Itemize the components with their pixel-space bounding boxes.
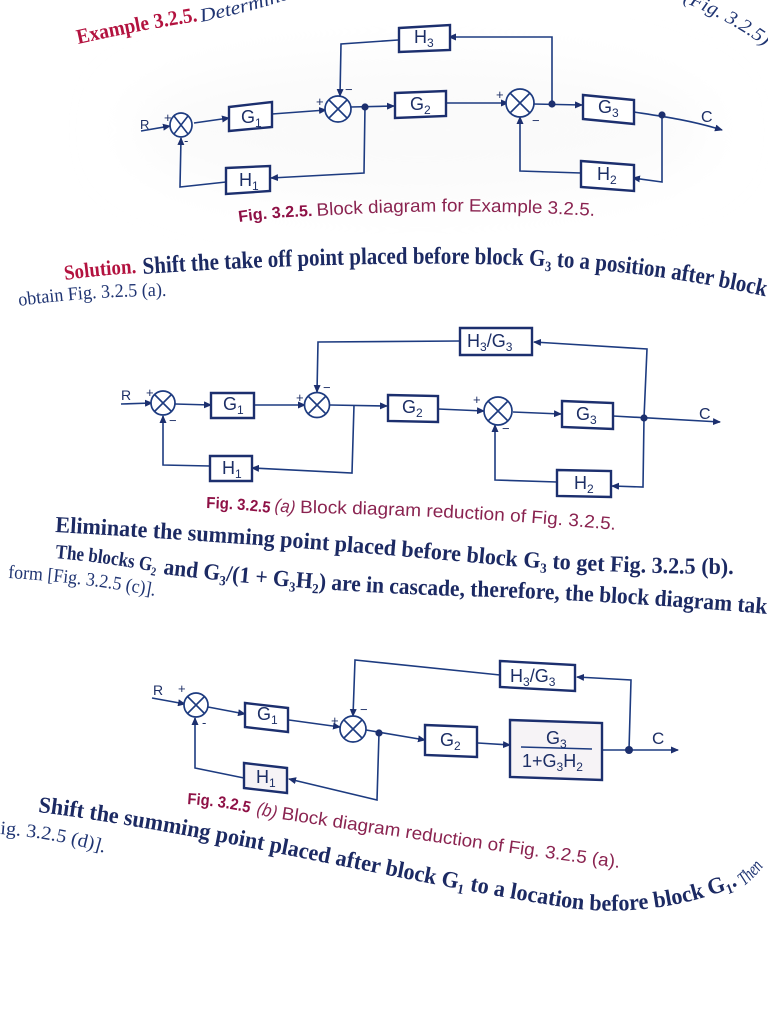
summing junction 1: [170, 113, 192, 137]
text block: eliminate the summing point: Eliminate the summing point placed before block G₃ to get Fig. 3.2.5 (b).: [55, 517, 733, 579]
block G3 over 1+G3H2: 3: [557, 760, 564, 774]
caption: Fig. 3.2.5: Fig. 3.2.5.: [238, 205, 312, 223]
signal labels: [140, 82, 713, 148]
block H3/G3: [500, 661, 575, 691]
summing junction 2: [304, 392, 330, 418]
text block: eliminate the summing point: [8, 517, 767, 614]
takeoff points: [375, 729, 633, 754]
block G3: 3: [612, 106, 619, 120]
block H3: H: [414, 27, 427, 47]
signal labels: [153, 681, 664, 748]
connecting lines and arrows: [152, 660, 678, 800]
block H1: H: [222, 458, 235, 478]
diagram: Fig. 3.2.5 (b): [152, 660, 678, 800]
block G2: [395, 91, 446, 118]
block H1: [244, 763, 287, 793]
block G1: 1: [271, 713, 278, 727]
signal labels: +: [473, 392, 481, 407]
block H3/G3: 3: [480, 340, 487, 354]
signal labels: −: [345, 82, 353, 97]
block H3/G3: H: [510, 666, 523, 686]
caption: Fig. 3.2.5 (b): Block diagram reduction of Fig. 3.2.5 (a).: [282, 807, 618, 870]
connecting lines and arrows: [141, 37, 722, 187]
block H1: [226, 166, 270, 194]
text block: eliminate the summing point: The blocks G₂: [56, 545, 156, 576]
block H3/G3: 3: [549, 675, 556, 689]
block H2: [557, 470, 611, 497]
text block: eliminate the summing point: and G₃/(1 + G₃H₂) are in cascade, therefore, the block diagram tak: [164, 562, 767, 614]
connecting lines and arrows: [121, 341, 720, 487]
signal labels: -: [184, 133, 188, 148]
caption: Fig. 3.2.5 (a): Fig. 3.2.5: [207, 496, 270, 513]
takeoff points: [361, 100, 666, 119]
block H3: 3: [427, 36, 434, 50]
signal labels: −: [532, 113, 540, 128]
block H1: H: [256, 767, 269, 787]
block H3/G3: [460, 328, 532, 355]
block G2: 2: [454, 739, 461, 753]
block G2: 2: [424, 103, 431, 117]
summing junction 1: [184, 693, 208, 717]
signal labels: −: [502, 421, 510, 436]
summing junction 2: [325, 96, 351, 122]
block G3 over 1+G3H2: G: [546, 728, 560, 748]
signal labels: -: [202, 715, 206, 730]
block G3 over 1+G3H2: 1+G: [522, 751, 557, 771]
block H3/G3: 3: [506, 340, 513, 354]
block G2: G: [410, 94, 424, 114]
signal labels: [121, 380, 711, 436]
summing junction 2: [340, 716, 366, 742]
caption: Fig. 3.2.5 (b): (b): [257, 802, 277, 821]
block G3: 3: [590, 413, 597, 427]
summing junction 3: [506, 89, 534, 117]
block H2: H: [597, 164, 610, 184]
block H2: [581, 161, 634, 191]
block G3 over 1+G3H2: 2: [576, 760, 583, 774]
caption: Fig. 3.2.5 (a): [207, 496, 614, 530]
text block: shift the summing point: ig. 3.2.5 (d)].: [0, 822, 104, 854]
signal labels: −: [323, 380, 331, 395]
caption: Fig. 3.2.5 (b): [188, 793, 618, 870]
block H1: [210, 456, 252, 481]
summing junction 1: [151, 391, 175, 415]
block G1: 1: [237, 403, 244, 417]
signal labels: C: [699, 406, 711, 423]
caption: Fig. 3.2.5 (b): Fig. 3.2.5: [188, 793, 251, 812]
block G3 over 1+G3H2: 3: [560, 737, 567, 751]
heading: example title: [76, 0, 768, 46]
block H2: 2: [587, 482, 594, 496]
text block: shift the summing point: Shift the summing point placed after block G₁ to a location before block G₁.: [39, 798, 736, 911]
signal labels: C: [652, 729, 664, 748]
signal labels: +: [316, 94, 324, 109]
takeoff point: [640, 414, 648, 422]
block H3/G3: /G: [487, 331, 506, 351]
diagram: Fig. 3.2.5 block diagram: [140, 25, 722, 194]
signal labels: R: [140, 117, 149, 132]
block G2: G: [440, 730, 454, 750]
block H3/G3: 3: [523, 675, 530, 689]
caption: Fig. 3.2.5 (a): (a): [275, 498, 295, 516]
block G1: 1: [255, 116, 262, 130]
text block: eliminate the summing point: form [Fig. 3.2.5 (c)].: [8, 564, 154, 598]
block G3: [562, 401, 613, 429]
caption: Fig. 3.2.5: [238, 198, 594, 223]
signal labels: +: [178, 681, 186, 696]
block G1: [229, 102, 272, 131]
signal labels: +: [496, 87, 504, 102]
block G3: [583, 95, 634, 124]
signal labels: R: [121, 387, 131, 403]
block H1: 1: [235, 467, 242, 481]
block G1: [211, 393, 254, 418]
block H1: 1: [269, 776, 276, 790]
text block: solution: obtain Fig. 3.2.5 (a).: [19, 283, 166, 306]
signal labels: R: [153, 682, 163, 698]
heading: example title: Example 3.2.5.: [76, 8, 197, 44]
signal labels: −: [360, 702, 368, 717]
block H1: H: [239, 170, 252, 190]
signal labels: −: [169, 413, 177, 428]
signal labels: +: [146, 385, 154, 400]
block H1: 1: [252, 179, 259, 193]
block G1: G: [223, 394, 237, 414]
block H3: [399, 25, 450, 52]
block G1: G: [241, 107, 255, 127]
text block: solution: Shift the take off point placed before block G₃ to a position after block: [143, 246, 768, 296]
text block: solution: Solution.: [64, 260, 136, 280]
block H3/G3: H: [467, 331, 480, 351]
caption: Fig. 3.2.5 (a): Block diagram reduction of Fig. 3.2.5.: [302, 500, 614, 530]
block H2: 2: [610, 173, 617, 187]
block G3: G: [576, 404, 590, 424]
signal labels: +: [296, 390, 304, 405]
block G3 over 1+G3H2: H: [563, 751, 576, 771]
caption: Fig. 3.2.5: Block diagram for Example 3.2.5.: [318, 198, 594, 216]
block H2: H: [574, 473, 587, 493]
block G3: G: [598, 97, 612, 117]
block G1: G: [257, 704, 271, 724]
summing junction 3: [484, 397, 512, 425]
block G1: [245, 703, 288, 732]
block G2: [388, 395, 438, 422]
block G3 over 1+G3H2: [510, 720, 602, 780]
block G2: G: [402, 397, 416, 417]
block H3/G3: /G: [530, 666, 549, 686]
signal labels: +: [164, 110, 172, 125]
signal labels: +: [331, 713, 339, 728]
block G2: [425, 725, 477, 757]
text block: shift the summing point: Then: [737, 862, 764, 886]
block G2: 2: [416, 406, 423, 420]
diagram: Fig. 3.2.5 (a): [121, 328, 720, 497]
signal labels: C: [701, 109, 713, 126]
